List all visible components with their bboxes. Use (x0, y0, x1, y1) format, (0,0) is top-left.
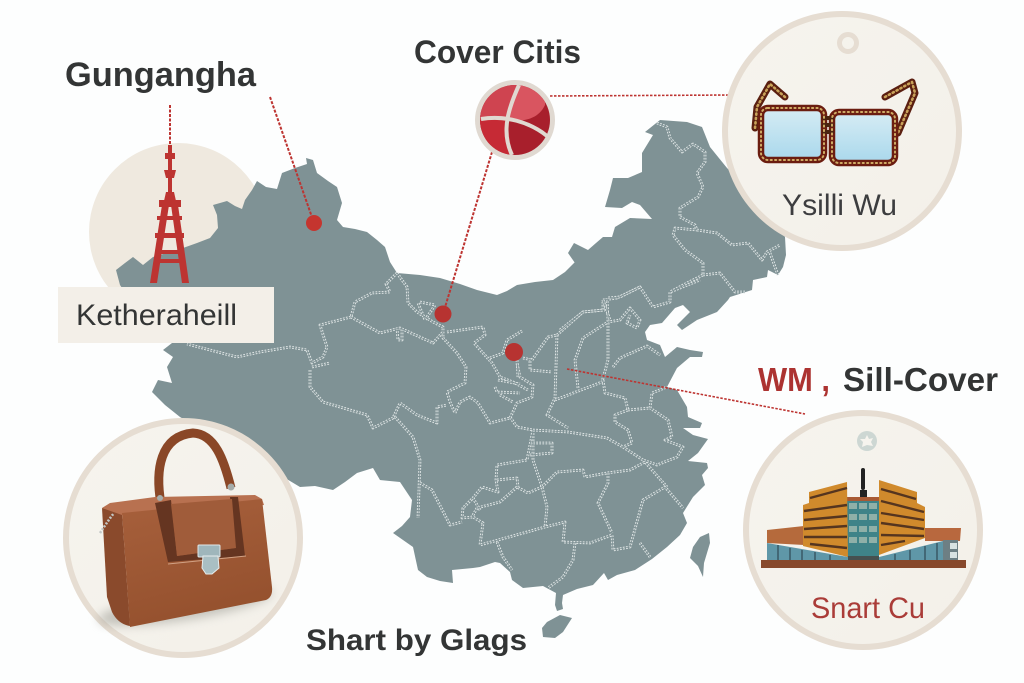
island: Hainan (542, 615, 572, 638)
icon: building (761, 470, 966, 568)
icon: small badge (857, 431, 877, 451)
mainland silhouette (116, 120, 786, 611)
heading: Shart by Glags: Shart by Glags (306, 624, 527, 657)
connector and marker: Gungangha (270, 97, 322, 231)
panel: tower (150, 105, 189, 283)
map of China (116, 120, 786, 638)
heading: Cover Citis: Cover Citis (414, 34, 581, 70)
connector: Sill-Cover line (567, 369, 805, 414)
connector and marker: Cover Citis (434, 152, 492, 322)
icon: red tower (150, 145, 189, 283)
label box: Ketheraheill: Ketheraheill (76, 299, 237, 332)
icon: hanging ring (840, 34, 856, 52)
icon: brown handbag (96, 433, 274, 634)
caption: Snart Cu: Snart Cu (811, 592, 925, 625)
marker: central (505, 343, 523, 361)
heading: WM, Sill-Cover (758, 361, 998, 398)
panel: glasses circle (725, 14, 959, 248)
icon: jewelled glasses (755, 82, 915, 163)
label box: Ketheraheill (58, 287, 274, 343)
dotted provincial borders (187, 123, 780, 588)
island: Taiwan (690, 533, 710, 577)
heading: WM, Sill-Cover: WM , (758, 361, 830, 398)
tower backdrop circle (89, 143, 267, 321)
panel: handbag circle (66, 421, 300, 655)
icon: red globe (475, 80, 555, 160)
panel: building circle (746, 413, 980, 647)
heading: WM, Sill-Cover: Sill-Cover (843, 361, 998, 398)
caption: Ysilli Wu: Ysilli Wu (782, 189, 897, 222)
connector: tower line (169, 105, 171, 146)
heading: Gungangha: Gungangha (65, 56, 257, 94)
connector: globe to glasses (550, 95, 732, 96)
